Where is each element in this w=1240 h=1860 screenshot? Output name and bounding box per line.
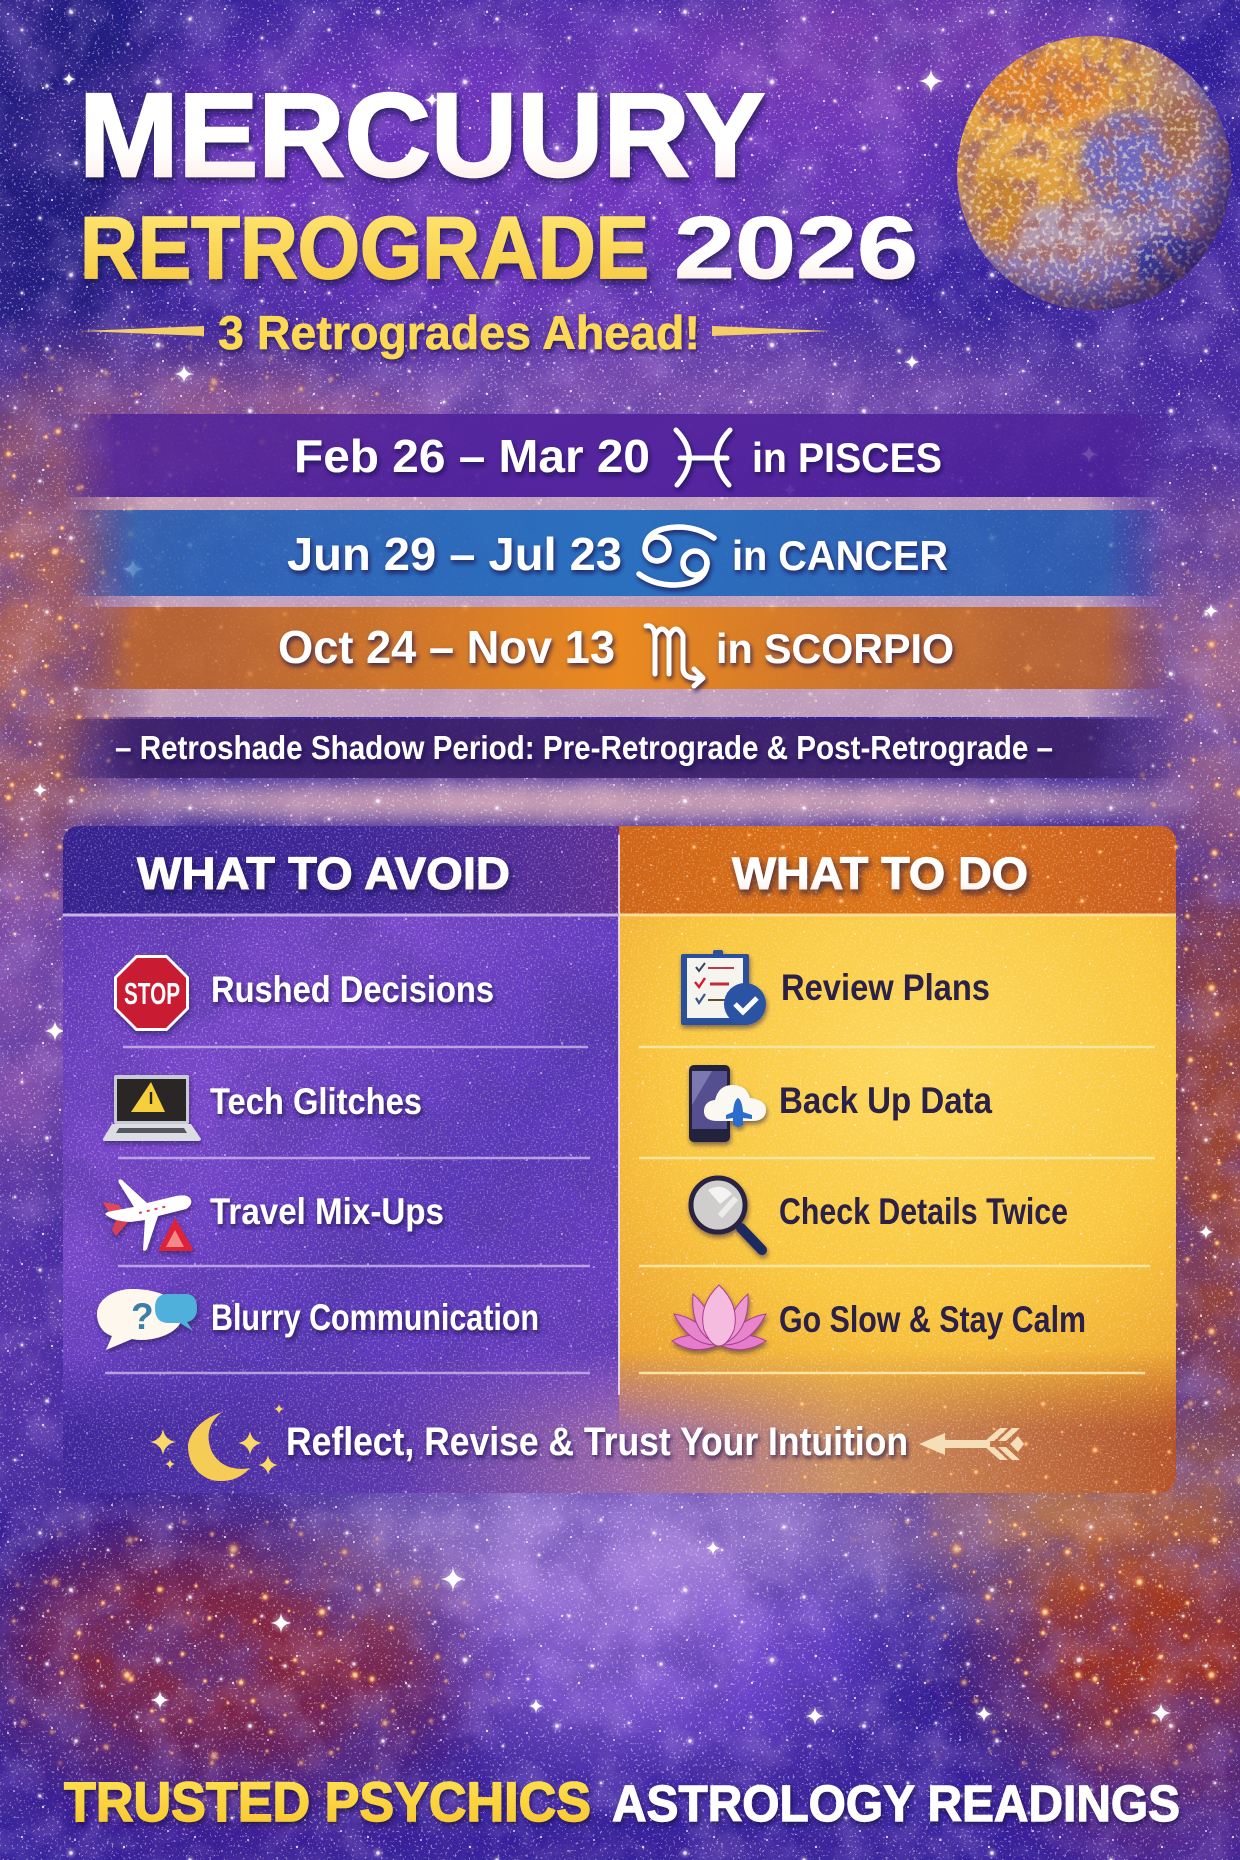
item: back up data: Back Up Data	[779, 1080, 992, 1121]
date band: Scorpio	[70, 607, 1170, 717]
icon: stop sign: STOP	[124, 976, 180, 1011]
shadow period band	[50, 719, 1175, 778]
Cancer sign name: in CANCER	[732, 532, 948, 579]
date band: Pisces	[60, 414, 1170, 510]
title	[79, 69, 918, 297]
item: check details twice: Check Details Twice	[779, 1191, 1068, 1232]
shadow period text: – Retroshade Shadow Period: Pre-Retrograde & Post-Retrograde –	[115, 729, 1053, 766]
icon: laptop warning	[103, 1075, 201, 1141]
subtitle with flanking rules	[81, 306, 831, 359]
closing line: Reflect, Revise & Trust Your Intuition	[286, 1420, 908, 1464]
Scorpio dates: Oct 24 – Nov 13	[278, 621, 615, 673]
date band: Cancer	[70, 510, 1170, 607]
footer service: ASTROLOGY READINGS	[612, 1775, 1180, 1832]
item: go slow and stay calm: Go Slow & Stay Calm	[779, 1299, 1086, 1340]
icon: moon and sparkles	[150, 1404, 284, 1481]
item: rushed decisions: Rushed Decisions	[211, 969, 494, 1010]
icon: magnifying glass	[691, 1178, 762, 1250]
heading: what to avoid: WHAT TO AVOID	[137, 848, 510, 899]
icon: plane with warning	[102, 1179, 193, 1251]
Pisces sign name: in PISCES	[752, 434, 942, 481]
icon: speech bubbles	[97, 1289, 197, 1350]
icon: clipboard checklist	[681, 950, 766, 1025]
panel: avoid and do table	[63, 826, 1176, 1493]
footer	[64, 1770, 1180, 1833]
item: review plans: Review Plans	[781, 967, 990, 1008]
subtitle text: 3 Retrogrades Ahead!	[218, 306, 700, 359]
icon: stop sign	[114, 955, 189, 1031]
icon: Pisces glyph	[676, 430, 730, 485]
Scorpio sign name: in SCORPIO	[716, 625, 954, 672]
item: blurry communication: Blurry Communication	[211, 1297, 539, 1338]
icon: speech bubbles: ?	[131, 1296, 154, 1337]
Cancer dates: Jun 29 – Jul 23	[287, 528, 622, 580]
title line: Retrograde: RETROGRADE	[80, 198, 649, 297]
icon: lotus flower	[672, 1285, 766, 1350]
item: tech glitches: Tech Glitches	[210, 1081, 422, 1122]
footer brand: TRUSTED PSYCHICS	[64, 1770, 591, 1833]
heading: what to do: WHAT TO DO	[732, 848, 1028, 899]
Pisces dates: Feb 26 – Mar 20	[294, 430, 650, 482]
icon: arrow	[919, 1428, 1024, 1460]
planet: Mercury	[957, 36, 1231, 310]
title line: Mercuury: MERCUURY	[79, 69, 765, 202]
icon: phone and cloud	[689, 1065, 766, 1142]
icon: Cancer glyph	[639, 527, 714, 585]
icon: Scorpio glyph	[646, 626, 703, 686]
title line: 2026: 2026	[674, 198, 918, 297]
item: travel mix-ups: Travel Mix-Ups	[210, 1191, 444, 1232]
